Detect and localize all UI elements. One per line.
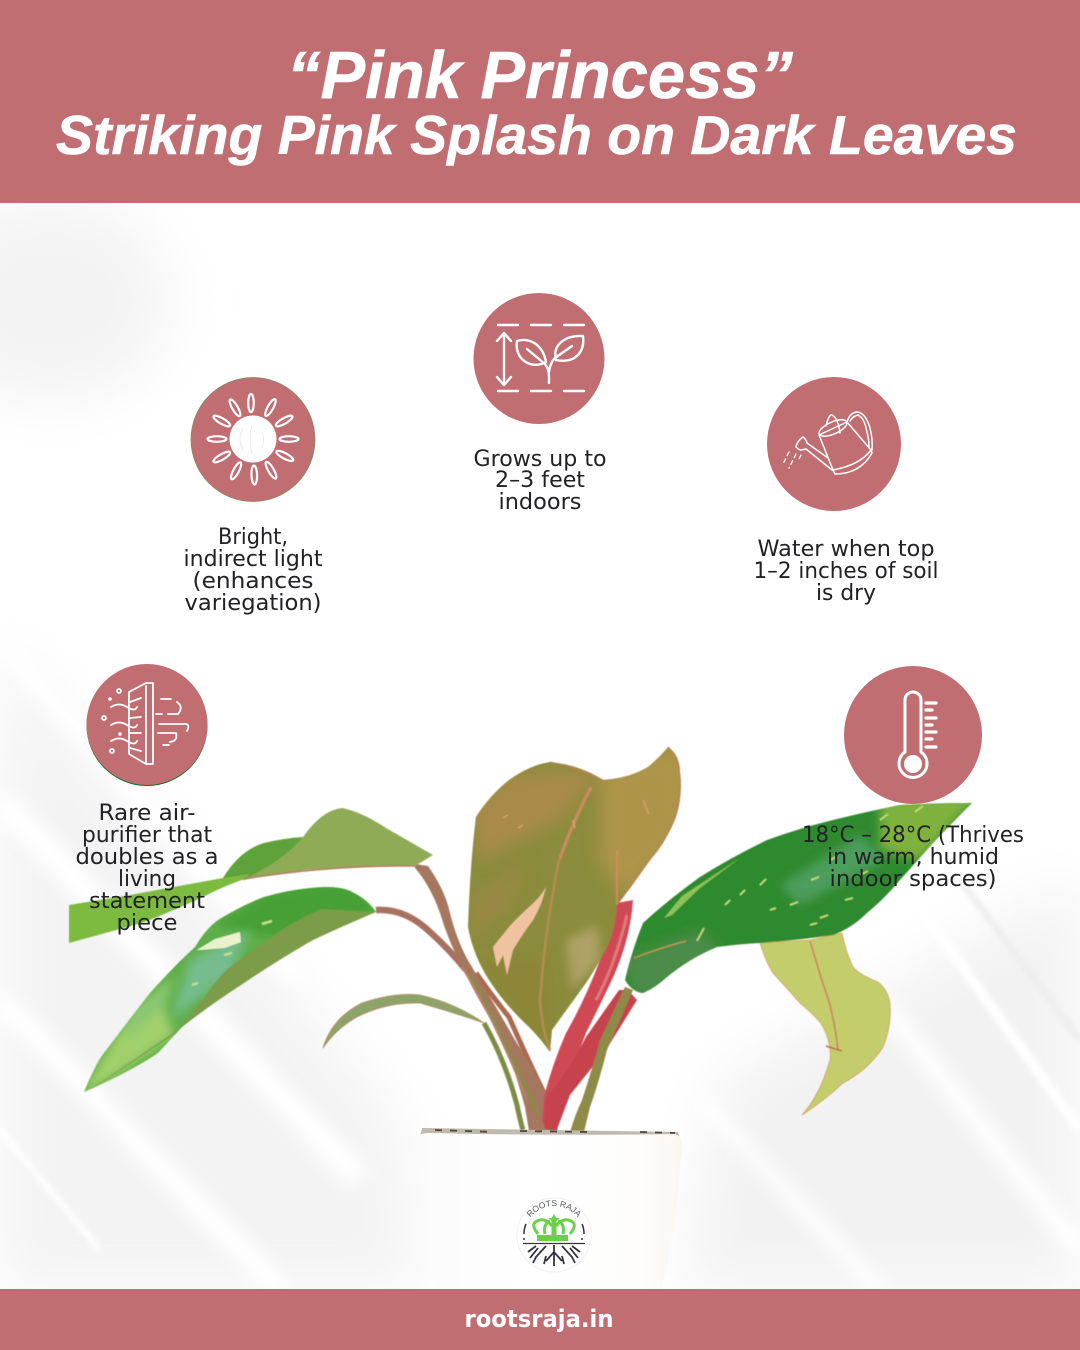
stem: second left stem [376,910,466,970]
leaf: right dark green [620,795,980,1000]
stem: small leaf [484,1023,523,1130]
title: “Pink Princess” [287,38,793,113]
caption: air purifier: living [118,866,176,892]
caption: temperature [802,822,1024,892]
icon: thermometer [844,666,982,804]
caption: light: (enhances [192,568,314,594]
icon: watering can [767,377,901,511]
caption: air purifier [76,800,218,936]
plant photo [60,740,980,1132]
leaf: small lower [323,994,484,1048]
subtitle: Striking Pink Splash on Dark Leaves [56,104,1017,166]
stem: red petiole [542,900,633,1130]
caption: water: Water when top [758,536,934,562]
caption: height: indoors [498,489,582,515]
caption: light: indirect light [184,546,323,572]
caption: air purifier: doubles as a [76,844,218,870]
caption: height [474,446,606,515]
icon: plant height [474,293,604,424]
caption: temperature: 18°C – 28°C (Thrives [802,822,1024,848]
leaf: top left [69,808,433,943]
caption: height: 2–3 feet [495,467,585,493]
caption: air purifier: Rare air- [98,800,196,826]
pot logo: ROOTS RAJA [526,1200,580,1218]
stem: red spathe [544,990,637,1132]
stem: thin right strand [476,973,545,1095]
footer banner [0,1289,1080,1350]
caption: light: Bright, [218,524,288,550]
icon: sun [191,378,315,502]
caption: water: is dry [816,580,876,606]
cream variegation patch [493,887,546,975]
footer website: rootsraja.in [464,1305,614,1333]
header banner [0,0,1080,203]
pot logo [516,1198,592,1272]
caption: air purifier: purifier that [82,822,212,848]
caption: light: variegation) [184,590,322,616]
caption: air purifier: statement [89,888,205,914]
stem: green petiole [570,987,633,1132]
caption: temperature: indoor spaces) [830,866,996,892]
caption: height: Grows up to [474,446,606,472]
leaf: hanging yellow-green [760,933,890,1115]
caption: light [184,524,323,616]
icon: air purifier [86,664,208,786]
stem: main left stem [415,864,558,1131]
caption: air purifier: piece [116,910,178,936]
leaf: tall central variegated [465,740,690,1055]
pot [420,1128,682,1272]
caption: temperature: in warm, humid [827,844,999,870]
leaf: lower left large [84,886,376,1092]
caption: water [754,536,938,606]
caption: water: 1–2 inches of soil [754,558,938,584]
